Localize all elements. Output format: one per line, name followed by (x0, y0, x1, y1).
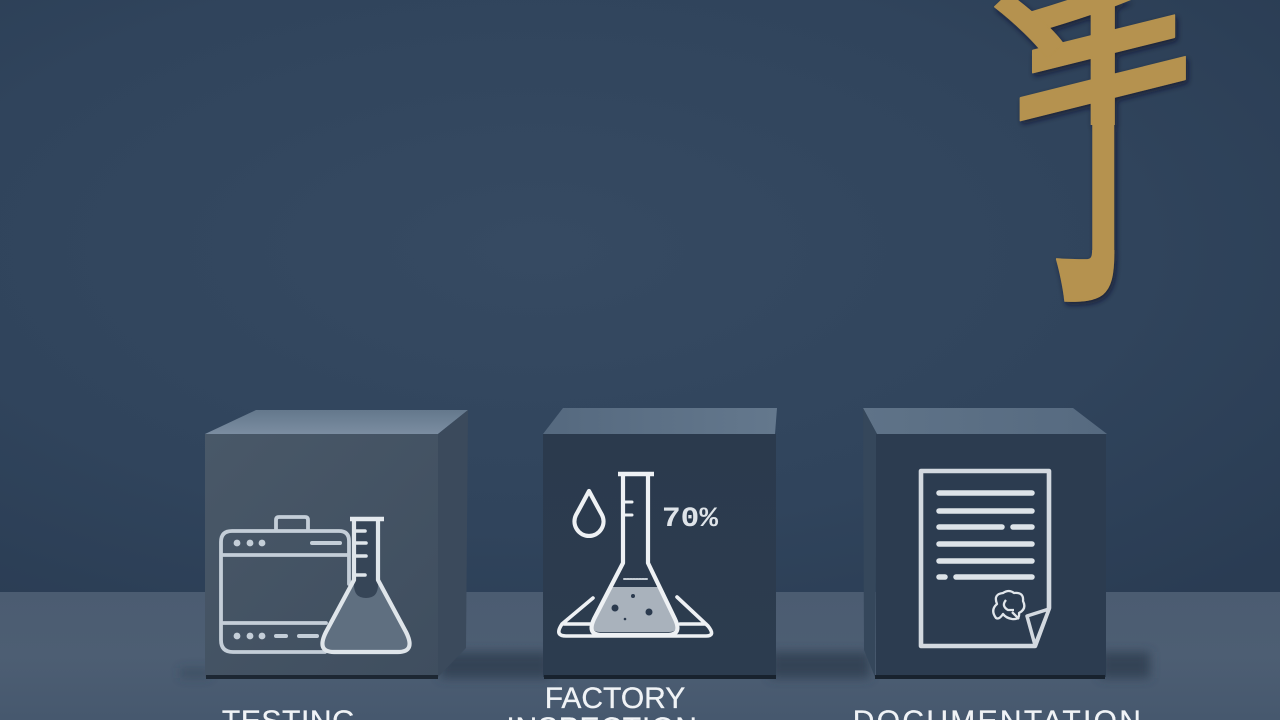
cube top face (543, 408, 777, 434)
cube base shadow (206, 675, 438, 679)
cube front face (205, 434, 438, 677)
cube top face (205, 410, 468, 434)
cube left face (863, 408, 877, 677)
cube top face (863, 408, 1107, 434)
document corner fold (1027, 609, 1049, 645)
label: factory inspection: FACTORY (545, 682, 685, 715)
floor shadows (180, 652, 1150, 678)
icon: inspection flask (559, 474, 712, 636)
icon: test flask (322, 519, 410, 652)
floor (0, 592, 1280, 720)
percentage label: 70% (662, 504, 718, 535)
cube: documentation (863, 408, 1107, 679)
icon: water drop (575, 491, 604, 536)
cube: factory inspection (543, 408, 777, 679)
cube front face (543, 434, 776, 677)
icon: document (921, 471, 1049, 646)
cube: testing (205, 410, 468, 679)
icon: briefcase window (221, 517, 349, 652)
cube base shadow (544, 675, 776, 679)
flask stand (559, 597, 712, 636)
cube front face (876, 434, 1106, 677)
cube right face (438, 410, 468, 677)
certificate seal (993, 591, 1024, 619)
cube base shadow (875, 675, 1105, 679)
